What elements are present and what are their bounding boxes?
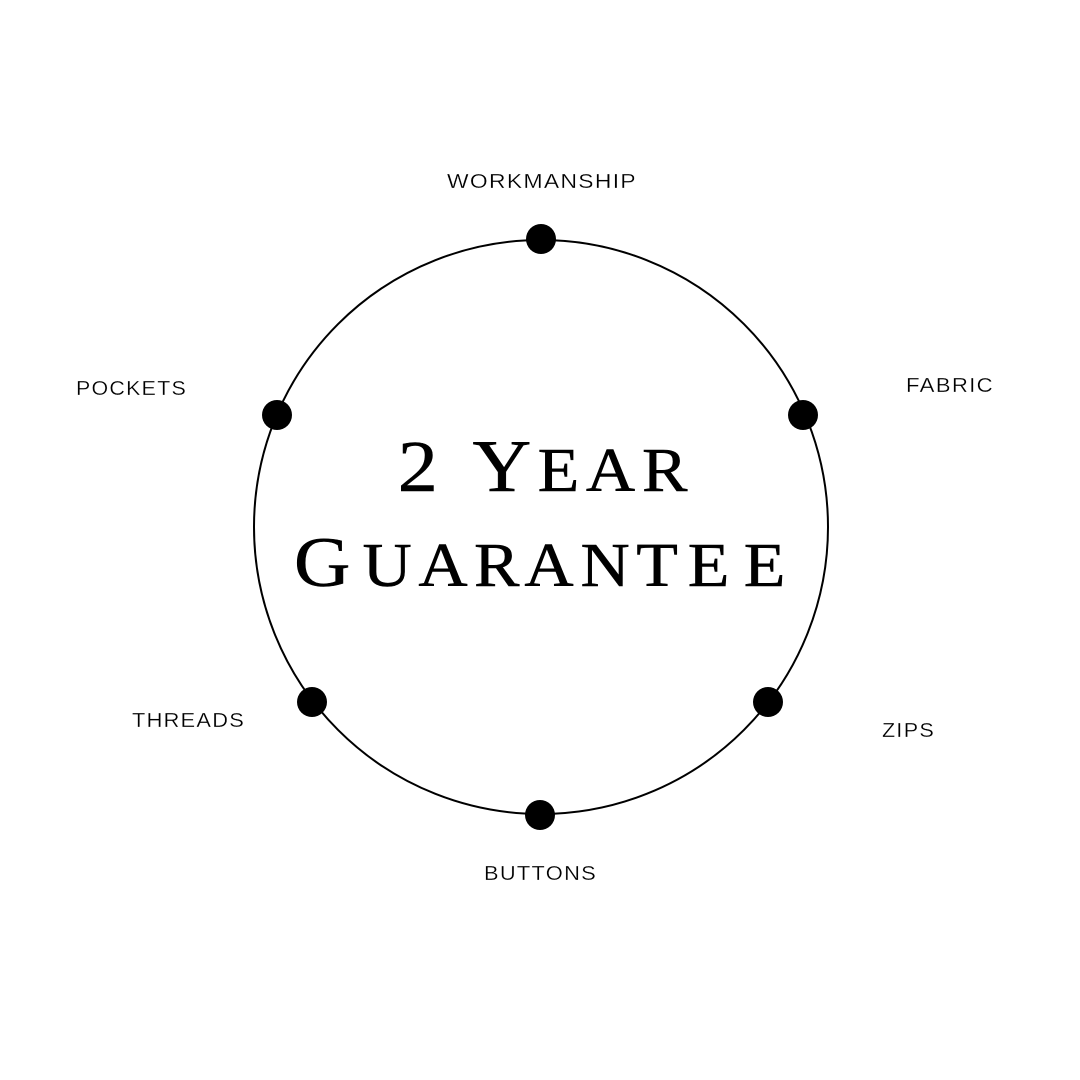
label: threads: THREADS [132, 709, 245, 732]
title line 2: UARANTEE [362, 532, 785, 600]
ring [254, 240, 828, 814]
dot: pockets [262, 400, 292, 430]
label: pockets: POCKETS [76, 377, 187, 400]
title line 1: 2 [398, 426, 438, 507]
title [294, 425, 785, 602]
title line 2: G [294, 523, 350, 602]
labels [76, 170, 994, 885]
dot: fabric [788, 400, 818, 430]
label: buttons: BUTTONS [484, 862, 597, 885]
dot: buttons [525, 800, 555, 830]
label: fabric: FABRIC [906, 374, 994, 397]
label: zips: ZIPS [882, 719, 935, 742]
label: workmanship: WORKMANSHIP [447, 170, 637, 193]
title line 1: EAR [538, 437, 688, 505]
title line 1: Y [473, 425, 531, 507]
dot: zips [753, 687, 783, 717]
dot: threads [297, 687, 327, 717]
dot: workmanship [526, 224, 556, 254]
